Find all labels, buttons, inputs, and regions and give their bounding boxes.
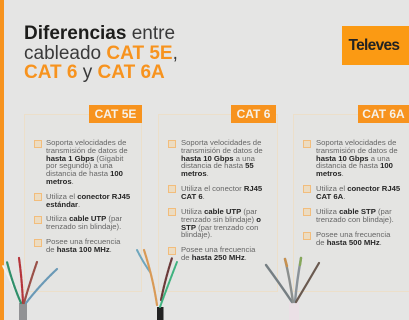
text: 6 speed: distancia de hasta 55 [181, 161, 254, 170]
left accent stripe [0, 0, 4, 320]
text: 6 speed: metros. [181, 169, 209, 178]
text: 6A cable: trenzado con blindaje). [316, 215, 394, 224]
heading: CAT 6A [358, 105, 409, 123]
text: 5E speed: Soporta velocidades de [46, 138, 126, 147]
text: 5E frequency: Posee una frecuencia [46, 237, 120, 246]
text: 6A speed: hasta 10 Gbps a una [316, 154, 390, 162]
text: 5E cable: trenzado sin blindaje). [46, 222, 121, 231]
text: 6A speed: Soporta velocidades de [316, 138, 396, 147]
check icon: 5E connector [34, 193, 42, 201]
check icon: 5E frequency [34, 239, 42, 247]
text: 6 speed: Soporta velocidades de [181, 138, 261, 147]
text: 6A speed: transmisión de datos de [316, 146, 398, 155]
text: 6 connector: Utiliza el conector RJ45 [181, 184, 262, 193]
text: 6A speed: distancia de hasta 100 [316, 161, 393, 170]
text: 6 connector: CAT 6. [181, 192, 205, 201]
check icon: 5E speed [34, 140, 42, 148]
check icon: 6A cable [303, 208, 311, 216]
text: 6A cable: Utiliza cable STP (par [316, 207, 392, 216]
text: 5E speed: distancia de hasta 100 [46, 169, 123, 178]
text: 6A connector [316, 184, 400, 201]
text: 6 connector [181, 184, 262, 201]
text: 6 speed: hasta 10 Gbps a una [181, 154, 255, 162]
check icon: 6A frequency [303, 232, 311, 240]
title [24, 23, 178, 83]
text: 5E connector [46, 192, 130, 209]
text: 5E cable [46, 214, 122, 231]
text: 5E frequency [46, 237, 120, 254]
text: 6 speed: transmisión de datos de [181, 146, 263, 155]
text: 5E frequency: de hasta 100 MHz. [46, 245, 112, 254]
text: 5E speed: metros. [46, 177, 74, 186]
text: 6 frequency: Posee una frecuencia [181, 245, 255, 254]
check icon: 6 speed [168, 140, 176, 148]
text: 6 frequency: de hasta 250 MHz. [181, 253, 247, 262]
heading: CAT 5E [89, 105, 142, 123]
text: 5E speed: transmisión de datos de [46, 146, 128, 155]
heading: CAT 6 [231, 105, 276, 123]
check icon: 6A connector [303, 185, 311, 193]
text: 5E cable: Utiliza cable UTP (par [46, 214, 122, 223]
text: 6 cable [181, 207, 261, 239]
text: 6A frequency: de hasta 500 MHz. [316, 238, 382, 247]
text: 6A speed: metros. [316, 169, 344, 178]
check icon: 6 connector [168, 185, 176, 193]
panel: CAT 6A [292, 114, 409, 292]
icon: CAT 5E cable [3, 258, 57, 320]
panel: CAT 5E [24, 114, 142, 292]
text: 6A connector: Utiliza el conector RJ45 [316, 184, 400, 193]
text: 5E connector: Utiliza el conector RJ45 [46, 192, 130, 201]
panel: CAT 6 [158, 114, 278, 292]
text: 6 cable: trenzado sin blindaje) o [181, 215, 261, 224]
text: 6A connector: CAT 6A. [316, 192, 345, 201]
text: 6 cable: STP (par trenzado con [181, 222, 258, 232]
logo: Televes: Televes [348, 37, 399, 54]
text: 5E speed: hasta 1 Gbps (Gigabit [46, 154, 123, 162]
title: CAT 6 y CAT 6A [24, 62, 165, 83]
text: 5E connector: estándar. [46, 200, 80, 209]
heading: CAT 5E: CAT 5E [95, 107, 136, 121]
check icon: 6 cable [168, 208, 176, 216]
heading: CAT 6: CAT 6 [237, 107, 270, 121]
heading: CAT 6A: CAT 6A [362, 107, 405, 121]
check icon: 6 frequency [168, 247, 176, 255]
text: 5E speed: por segundo) a una [46, 161, 113, 170]
text: 6 frequency [181, 245, 256, 262]
text: 6A speed [316, 138, 398, 178]
text: 6A frequency [316, 230, 390, 247]
text: 6A frequency: Posee una frecuencia [316, 230, 390, 239]
text: 6 cable: blindaje). [181, 230, 212, 239]
icon: CAT 6 cable [137, 250, 177, 320]
text: 5E speed [46, 138, 128, 186]
icon: CAT 6A cable [266, 258, 319, 320]
text: 6 cable: Utiliza cable UTP (par [181, 207, 257, 216]
title: cableado CAT 5E, [24, 42, 178, 64]
text: 6 speed [181, 138, 263, 178]
check icon: 6A speed [303, 140, 311, 148]
text: 6A cable [316, 207, 394, 224]
title: Diferencias entre [24, 23, 175, 44]
logo: Televes [342, 26, 409, 65]
check icon: 5E cable [34, 216, 42, 224]
